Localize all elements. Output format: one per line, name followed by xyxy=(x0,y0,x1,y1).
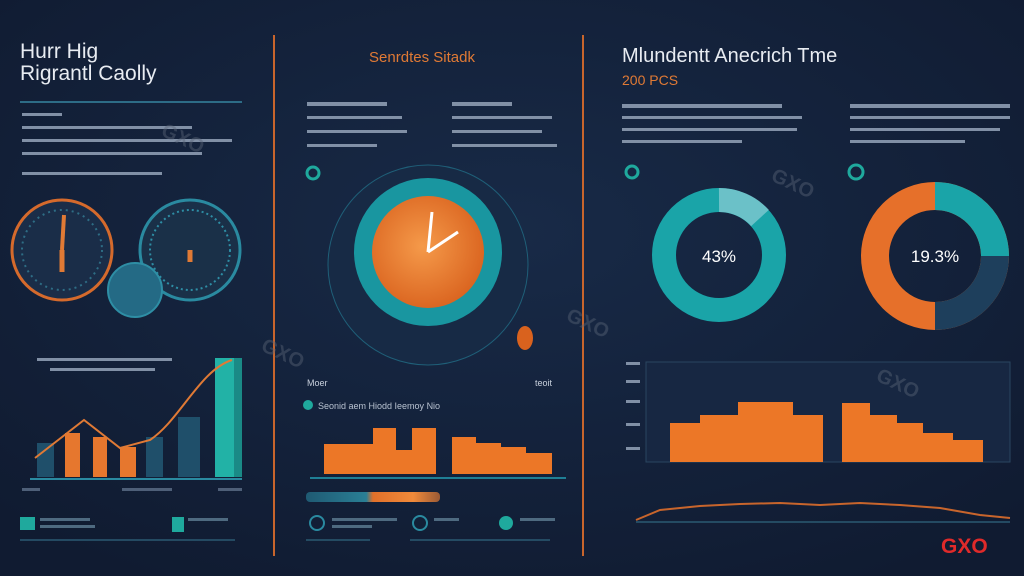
icons: left bottom xyxy=(20,517,235,540)
title: right: Mlundentt Anecrich Tme xyxy=(622,45,837,67)
labels: middle: Moer xyxy=(307,378,328,388)
text block: middle xyxy=(307,102,557,147)
watermarks xyxy=(158,120,922,403)
icon: gauge teal xyxy=(140,200,240,300)
legend: middle: Seonid aem Hiodd Ieemoy Nio xyxy=(318,401,440,411)
watermarks: GXO xyxy=(258,335,307,373)
watermarks: GXO xyxy=(873,365,922,403)
watermarks: GXO xyxy=(768,165,817,203)
panel: middle xyxy=(303,49,566,540)
icon: small ring xyxy=(307,167,319,179)
icons: middle bottom xyxy=(306,516,555,540)
labels: middle xyxy=(307,378,553,388)
donut: 19.3% xyxy=(875,196,995,316)
panel: left xyxy=(12,40,242,540)
panel: right xyxy=(622,45,1010,522)
logo: GXO: GXO xyxy=(941,535,988,558)
title: middle: Senrdtes Sitadk xyxy=(369,49,475,66)
gradient bar xyxy=(306,492,440,502)
text block: right xyxy=(622,104,1010,143)
icon: rings xyxy=(626,165,863,179)
line chart: right xyxy=(636,503,1010,522)
title: left: Hurr Hig xyxy=(20,40,98,63)
donut: 19.3%: 19.3% xyxy=(911,247,959,266)
donut: 43%: 43% xyxy=(702,247,736,266)
title: left xyxy=(20,40,157,85)
donut: 43% xyxy=(664,200,774,310)
bar chart: right xyxy=(626,362,1010,462)
icon: gauge orange xyxy=(12,200,112,300)
subtitle: 200 PCS xyxy=(622,72,678,88)
clock xyxy=(328,165,533,365)
icon: small teal disc xyxy=(108,263,162,317)
watermarks: GXO xyxy=(158,120,207,158)
labels: middle: teoit xyxy=(535,378,553,388)
bar chart: middle xyxy=(310,428,566,478)
bar chart: left xyxy=(22,358,242,491)
text block: left xyxy=(22,113,232,175)
watermarks: GXO xyxy=(563,305,612,343)
title: left: Rigrantl Caolly xyxy=(20,62,157,85)
